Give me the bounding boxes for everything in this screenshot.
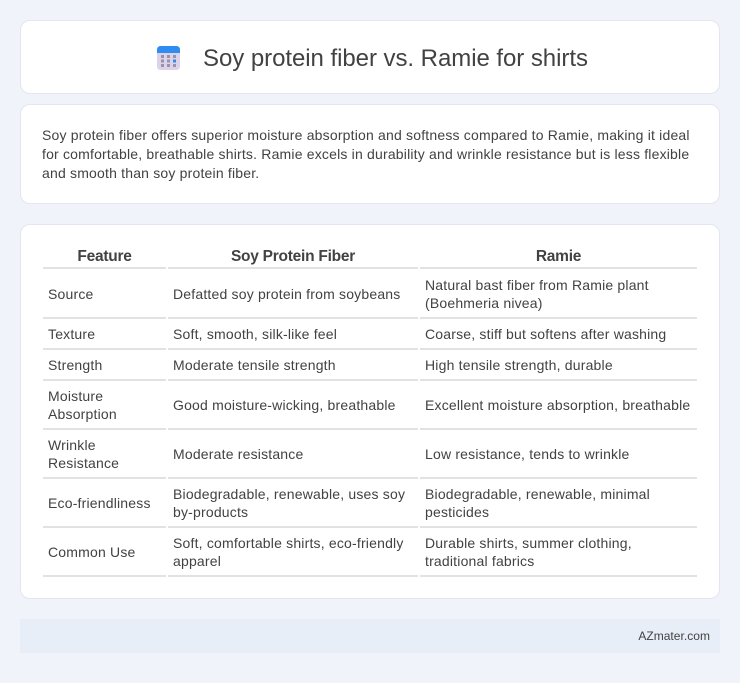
comparison table: Biodegradable, renewable, uses soy: [173, 486, 405, 502]
row: Moisture Absorption: [48, 388, 117, 422]
comparison table: Low resistance, tends to wrinkle: [425, 446, 630, 462]
comparison table: traditional fabrics: [425, 553, 534, 569]
row: Moisture Absorption: Moisture: [48, 388, 103, 404]
panel: title card: [20, 20, 720, 94]
comparison table: High tensile strength, durable: [425, 357, 613, 373]
row: Wrinkle Resistance: Wrinkle: [48, 437, 96, 453]
comparison table: Coarse, stiff but softens after washing: [425, 326, 666, 342]
row: Common Use: Common Use: [48, 544, 135, 560]
row: Texture: Texture: [48, 326, 95, 342]
panel: summary: [20, 104, 720, 204]
title: Soy protein fiber vs. Ramie for shirts: [203, 45, 588, 72]
header: Feature: Feature: [77, 248, 132, 265]
panel: comparison table: [20, 224, 720, 599]
footer bar: [20, 619, 720, 653]
summary text: Soy protein fiber offers superior moisture absorption and softness compared to Ramie, making it ideal: [42, 127, 690, 143]
icon: calendar grid: [157, 46, 180, 70]
summary text: and smooth than soy protein fiber.: [42, 165, 259, 181]
comparison table: Soft, smooth, silk-like feel: [173, 326, 337, 342]
header: Ramie: Ramie: [536, 248, 581, 265]
summary text: [42, 127, 690, 181]
summary text: for comfortable, breathable shirts. Ramie excels in durability and wrinkle resistance but is less flexible: [42, 146, 689, 162]
comparison table: Defatted soy protein from soybeans: [173, 286, 400, 302]
row: Eco-friendliness: Eco-friendliness: [48, 495, 151, 511]
row: Wrinkle Resistance: [48, 437, 119, 471]
comparison table: Natural bast fiber from Ramie plant: [425, 277, 649, 293]
header: Soy Protein Fiber: Soy Protein Fiber: [231, 248, 355, 265]
row: Source: Source: [48, 286, 94, 302]
row: Moisture Absorption: Absorption: [48, 406, 117, 422]
row: Strength: Strength: [48, 357, 102, 373]
comparison table: Moderate resistance: [173, 446, 303, 462]
comparison table: by-products: [173, 504, 248, 520]
comparison table: Good moisture-wicking, breathable: [173, 397, 396, 413]
comparison table: apparel: [173, 553, 221, 569]
comparison table: Soft, comfortable shirts, eco-friendly: [173, 535, 404, 551]
comparison table: Biodegradable, renewable, minimal: [425, 486, 650, 502]
comparison table: Excellent moisture absorption, breathable: [425, 397, 690, 413]
row: Wrinkle Resistance: Resistance: [48, 455, 119, 471]
comparison table: pesticides: [425, 504, 489, 520]
comparison table: Durable shirts, summer clothing,: [425, 535, 632, 551]
footer credit: AZmater.com: [638, 629, 710, 643]
comparison table: Moderate tensile strength: [173, 357, 336, 373]
comparison table: (Boehmeria nivea): [425, 295, 543, 311]
